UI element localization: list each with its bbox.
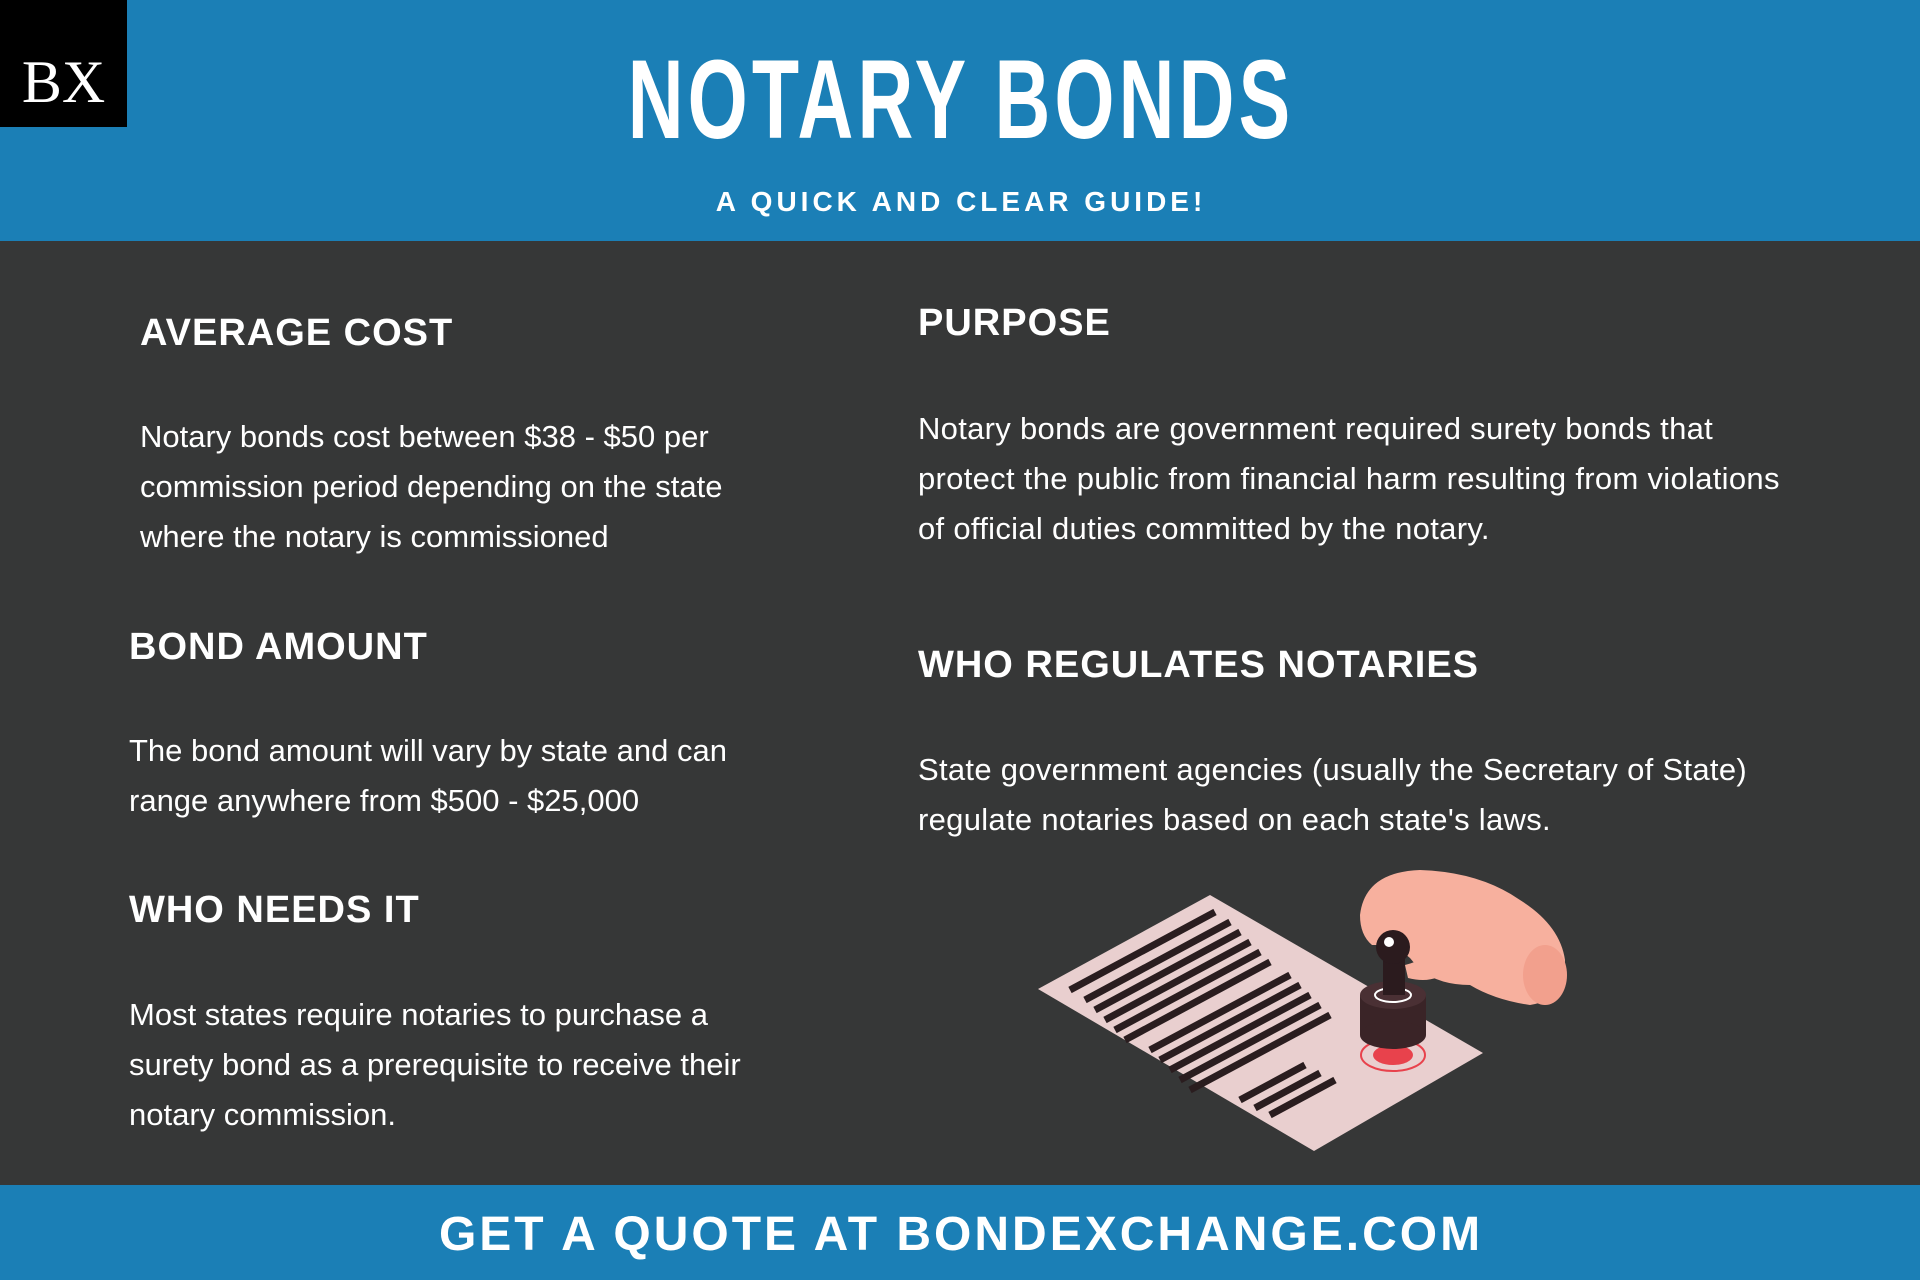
icon: stamp and hand [1360,870,1567,1049]
text: purpose: protect the public from financial harm resulting from violations [918,461,1780,496]
text: average cost: where the notary is commissioned [140,519,609,554]
heading: who regulates notaries: WHO REGULATES NOTARIES [918,644,1479,686]
text: purpose: of official duties committed by the notary. [918,511,1490,546]
section: bond amount [129,626,727,818]
illustration: notary stamp on document [1038,870,1567,1151]
text: who needs it: surety bond as a prerequisite to receive their [129,1047,741,1082]
text: who needs it [129,997,741,1132]
section: who needs it [129,889,741,1132]
text: average cost: Notary bonds cost between $38 - $50 per [140,419,709,454]
section: purpose [918,302,1780,546]
title: NOTARY BONDS [628,37,1294,162]
text: bond amount: The bond amount will vary by state and can [129,733,727,768]
text: who regulates notaries: State government agencies (usually the Secretary of State) [918,752,1747,787]
text: who needs it: notary commission. [129,1097,396,1132]
heading: average cost: AVERAGE COST [140,312,453,354]
logo: BX [0,0,127,127]
subtitle: A QUICK AND CLEAR GUIDE! [716,186,1206,217]
text: average cost: commission period depending on the state [140,469,722,504]
text: average cost [140,419,722,554]
heading: bond amount: BOND AMOUNT [129,626,428,668]
text: who regulates notaries: regulate notaries based on each state's laws. [918,802,1551,837]
text: purpose [918,411,1780,546]
section: average cost [140,312,722,554]
section: who regulates notaries [918,644,1747,837]
text: who regulates notaries [918,752,1747,837]
logo: BX: BX [22,49,105,115]
heading: purpose: PURPOSE [918,302,1111,344]
text: bond amount [129,733,727,818]
text: bond amount: range anywhere from $500 - $25,000 [129,783,639,818]
text: purpose: Notary bonds are government required surety bonds that [918,411,1713,446]
header band [0,0,1920,241]
icon: document [1038,895,1483,1151]
heading: who needs it: WHO NEEDS IT [129,889,420,931]
text: who needs it: Most states require notaries to purchase a [129,997,708,1032]
footer band [0,1185,1920,1280]
footer call to action: GET A QUOTE AT BONDEXCHANGE.COM [439,1208,1483,1261]
